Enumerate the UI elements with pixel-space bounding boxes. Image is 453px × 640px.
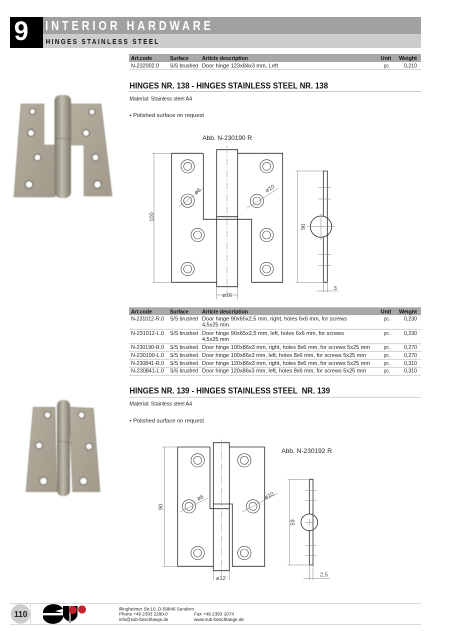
table: hinge 138 articles: S/S brushed [170,345,198,351]
table: hinge 138 articles: Door hinge 90x65x2,5 mm, left, holes 6x6 mm, for screws [202,331,345,337]
header title band [43,17,421,34]
technical drawing: hinge 138: ø16 [222,293,232,299]
table: top article: Door hinge 123x84x3 mm, Left [202,63,279,69]
table: hinge 138 articles: S/S brushed [170,353,198,359]
table: top article [129,54,421,70]
footer contact text: Fax +49 2393 1074 [194,612,234,617]
table: hinge 138 articles: N-231012-R.0 [131,317,164,323]
technical drawing: hinge 139 [159,439,332,582]
table: hinge 138 articles: 4,5x25 mm [202,322,229,328]
table: hinge 138 articles: N-231012-L.0 [131,331,164,337]
table: top article: Art.code [131,56,152,62]
table: hinge 138 articles: 0,310 [404,361,417,367]
logo [43,604,86,624]
footer contact text: Phone +49 2393 2280-0 [119,612,168,617]
text: material 138: Material: Stainless steel A4 [130,96,192,102]
technical drawing: hinge 138: 100 [150,212,156,222]
header subtitle band [43,34,421,48]
technical drawing: hinge 139: ø12 [216,576,226,582]
table: hinge 138 articles: 0,230 [404,317,417,323]
table: hinge 138 articles: S/S brushed [170,317,198,323]
photo: hinge 138 [14,95,112,198]
table: hinge 138 articles: pc. [384,369,390,375]
table: hinge 138 articles: Door hinge 100x86x3 mm, left, holes 8x6 mm, for screws 5x25 mm [202,353,366,359]
technical drawing: hinge 139: 2,5 [320,572,328,578]
footer band [10,604,421,624]
table: top article: Article description [202,56,248,62]
table: hinge 138 articles: pc. [384,361,390,367]
technical drawing: hinge 138: ø10 [265,184,276,194]
table: hinge 138 articles: Article description [202,309,248,315]
technical drawing: hinge 139: 90 [159,504,165,510]
technical drawing: hinge 139: ø10 [264,492,275,501]
table: hinge 138 articles: S/S brushed [170,369,198,375]
table: hinge 138 articles: Door hinge 90x65x2,5 mm, right, holes 6x6 mm, for screws [202,317,348,323]
footer contact text: www.sub-beschlaege.de [194,617,244,622]
footer contact text [119,607,244,622]
technical drawing: hinge 138: ø6 [194,187,202,196]
table: top article: S/S brushed [170,63,198,69]
technical drawing: hinge 138: 96 [301,224,307,230]
table: top article: Weight [399,56,417,62]
text: material 139: Material: Stainless steel A4 [130,402,192,408]
table: hinge 138 articles: 0,310 [404,369,417,375]
table: hinge 138 articles: N-230841-L.0 [131,369,164,375]
photo: hinge 139 [26,400,100,496]
table: top article: pc. [384,63,390,69]
table: hinge 138 articles [129,307,421,375]
table: hinge 138 articles: Surface [170,309,189,315]
page number [11,604,30,624]
technical drawing: hinge 139: ø6 [196,494,205,502]
table: hinge 138 articles: N-230190-L.0 [131,353,164,359]
table: hinge 138 articles: 0,270 [404,353,417,359]
table: hinge 138 articles: Art.code [131,309,152,315]
table: hinge 138 articles: pc. [384,345,390,351]
table: hinge 138 articles: 4,5x25 mm [202,337,229,343]
header title band: INTERIOR HARDWARE [45,18,211,33]
table: hinge 138 articles: 0,270 [404,345,417,351]
table: hinge 138 articles: Unit [381,309,391,315]
technical drawing: hinge 139: Abb. N-230192 R [281,448,332,455]
heading: hinges nr. 138: HINGES NR. 138 - HINGES STAINLESS STEEL NR. 138 [130,80,328,90]
text: polished note 138: • Polished surface on request [130,113,205,119]
table: hinge 138 articles: N-230841-R.0 [131,361,164,367]
technical drawing: hinge 138: Abb. N-230190 R [202,135,252,142]
technical drawing: hinge 139: 59 [291,519,297,526]
table: hinge 138 articles: Weight [399,309,417,315]
footer contact text: info@sub-beschlaege.de [119,617,169,622]
table: hinge 138 articles: 0,230 [404,331,417,337]
table: hinge 138 articles: S/S brushed [170,361,198,367]
table: hinge 138 articles: N-230190-R.0 [131,345,164,351]
footer contact text: Illingheimer Str.10, D-59846 Sundern [119,607,194,612]
table: top article: Unit [381,56,391,62]
table: hinge 138 articles: Door hinge 100x86x3 mm, right, holes 8x6 mm, for screws 5x25 mm [202,345,370,351]
technical drawing: hinge 138 [150,135,338,299]
table: hinge 138 articles: Door hinge 120x86x3 mm, left, holes 8x6 mm, for screws 5x25 mm [202,369,366,375]
header subtitle band: HINGES STAINLESS STEEL [46,39,158,46]
text: polished note 139: • Polished surface on request [130,419,205,425]
chapter number box [10,16,43,48]
heading: hinges nr. 139: HINGES NR. 139 - HINGES STAINLESS STEEL NR. 139 [130,385,330,395]
table: hinge 138 articles: pc. [384,331,390,337]
table: hinge 138 articles: Door hinge 120x86x3 mm, right, holes 8x6 mm, for screws 5x25 mm [202,361,370,367]
table: hinge 138 articles: pc. [384,353,390,359]
table: top article: 0,210 [404,63,417,69]
page number: 110 [14,610,28,619]
chapter number box: 9 [14,16,28,46]
technical drawing: hinge 138: 3 [334,286,337,292]
table: hinge 138 articles: S/S brushed [170,331,198,337]
table: top article: N-232002.0 [131,63,159,69]
table: top article: Surface [170,56,189,62]
table: hinge 138 articles: pc. [384,317,390,323]
